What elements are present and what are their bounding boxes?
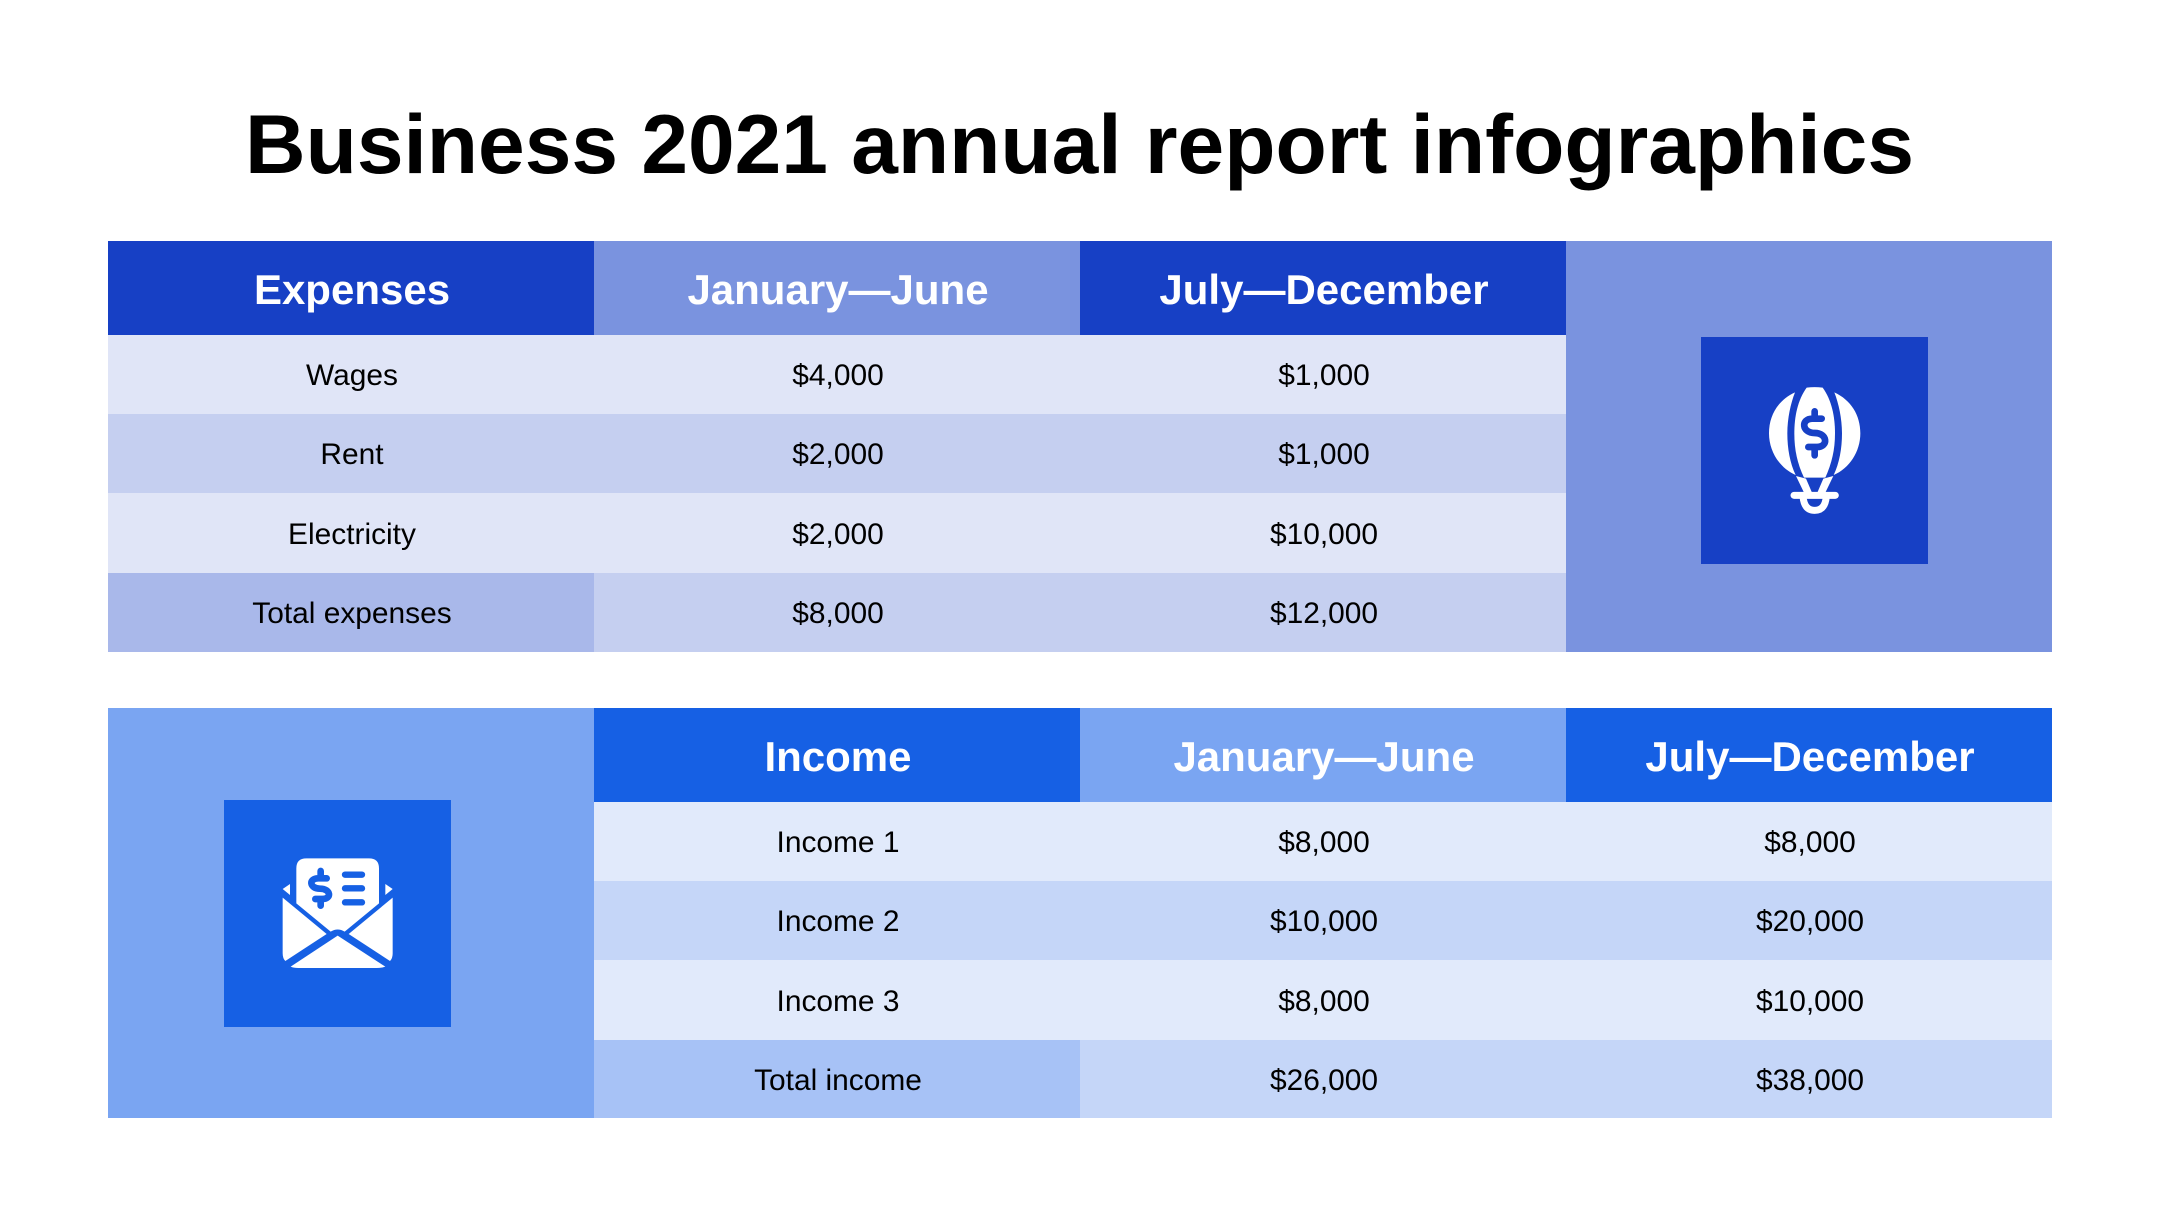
row: Total expenses July—December bbox=[1080, 573, 1566, 652]
row: Income 3 January—June: $8,000 bbox=[1278, 984, 1370, 1018]
row: Income 1 July—December: $8,000 bbox=[1764, 826, 1856, 859]
row: Wages label: Wages bbox=[306, 359, 398, 392]
row: Rent July—December: $1,000 bbox=[1278, 438, 1370, 471]
title: Business 2021 annual report infographics bbox=[245, 97, 1914, 191]
panel: balloon icon background bbox=[1566, 241, 2052, 652]
header: Expenses bbox=[108, 241, 594, 335]
row: Income 3 label bbox=[594, 960, 1080, 1040]
panel: envelope icon background bbox=[108, 708, 594, 1118]
header: July—December bbox=[1566, 708, 2052, 802]
row: Income 3 January—June bbox=[1080, 960, 1566, 1040]
row: Total income label bbox=[594, 1040, 1080, 1118]
row: Income 3 July—December: $10,000 bbox=[1756, 984, 1864, 1018]
row: Income 1 label bbox=[594, 802, 1080, 881]
row: Income 2 July—December bbox=[1566, 881, 2052, 960]
row: Wages January—June bbox=[594, 335, 1080, 414]
row: Total expenses July—December: $12,000 bbox=[1270, 597, 1378, 630]
row: Total expenses label: Total expenses bbox=[252, 597, 452, 630]
row: Income 1 January—June: $8,000 bbox=[1278, 826, 1370, 859]
header: January—June bbox=[1080, 708, 1566, 802]
row: Electricity January—June: $2,000 bbox=[792, 518, 884, 550]
row: Total income January—June bbox=[1080, 1040, 1566, 1118]
icon: hot air balloon with dollar sign bbox=[1701, 337, 1928, 564]
row: Total expenses January—June bbox=[594, 573, 1080, 652]
row: Total income January—June: $26,000 bbox=[1270, 1064, 1378, 1096]
header: July—December bbox=[1080, 241, 1566, 335]
row: Total expenses January—June: $8,000 bbox=[792, 597, 884, 630]
header: January—June: January—June bbox=[1173, 733, 1475, 780]
header: Income: Income bbox=[764, 733, 912, 780]
row: Rent label bbox=[108, 414, 594, 493]
row: Income 1 label: Income 1 bbox=[777, 826, 899, 859]
row: Rent label: Rent bbox=[320, 438, 384, 471]
row: Income 1 January—June bbox=[1080, 802, 1566, 881]
row: Electricity label bbox=[108, 493, 594, 573]
icon: open envelope with dollar invoice bbox=[224, 800, 451, 1027]
row: Income 2 label bbox=[594, 881, 1080, 960]
header: January—June bbox=[594, 241, 1080, 335]
header: July—December: July—December bbox=[1645, 733, 1975, 780]
panel: expenses table bbox=[108, 241, 2052, 652]
row: Electricity July—December: $10,000 bbox=[1270, 518, 1378, 550]
row: Income 3 July—December bbox=[1566, 960, 2052, 1040]
row: Wages January—June: $4,000 bbox=[792, 359, 884, 392]
row: Wages label bbox=[108, 335, 594, 414]
row: Income 2 January—June bbox=[1080, 881, 1566, 960]
header: January—June: January—June bbox=[687, 266, 989, 313]
header: July—December: July—December bbox=[1159, 266, 1489, 313]
header: Income bbox=[594, 708, 1080, 802]
row: Income 2 July—December: $20,000 bbox=[1756, 905, 1864, 938]
row: Income 1 July—December bbox=[1566, 802, 2052, 881]
row: Rent July—December bbox=[1080, 414, 1566, 493]
row: Electricity July—December bbox=[1080, 493, 1566, 573]
row: Total income label: Total income bbox=[754, 1064, 922, 1096]
row: Income 2 label: Income 2 bbox=[777, 905, 899, 938]
row: Rent January—June: $2,000 bbox=[792, 438, 884, 471]
row: Rent January—June bbox=[594, 414, 1080, 493]
row: Income 3 label: Income 3 bbox=[777, 984, 899, 1018]
panel: income table bbox=[108, 708, 2052, 1118]
header: Expenses: Expenses bbox=[254, 266, 450, 313]
row: Total income July—December bbox=[1566, 1040, 2052, 1118]
row: Wages July—December bbox=[1080, 335, 1566, 414]
row: Electricity label: Electricity bbox=[288, 518, 416, 550]
row: Electricity January—June bbox=[594, 493, 1080, 573]
row: Income 2 January—June: $10,000 bbox=[1270, 905, 1378, 938]
row: Total income July—December: $38,000 bbox=[1756, 1064, 1864, 1096]
row: Wages July—December: $1,000 bbox=[1278, 359, 1370, 392]
row: Total expenses label bbox=[108, 573, 594, 652]
